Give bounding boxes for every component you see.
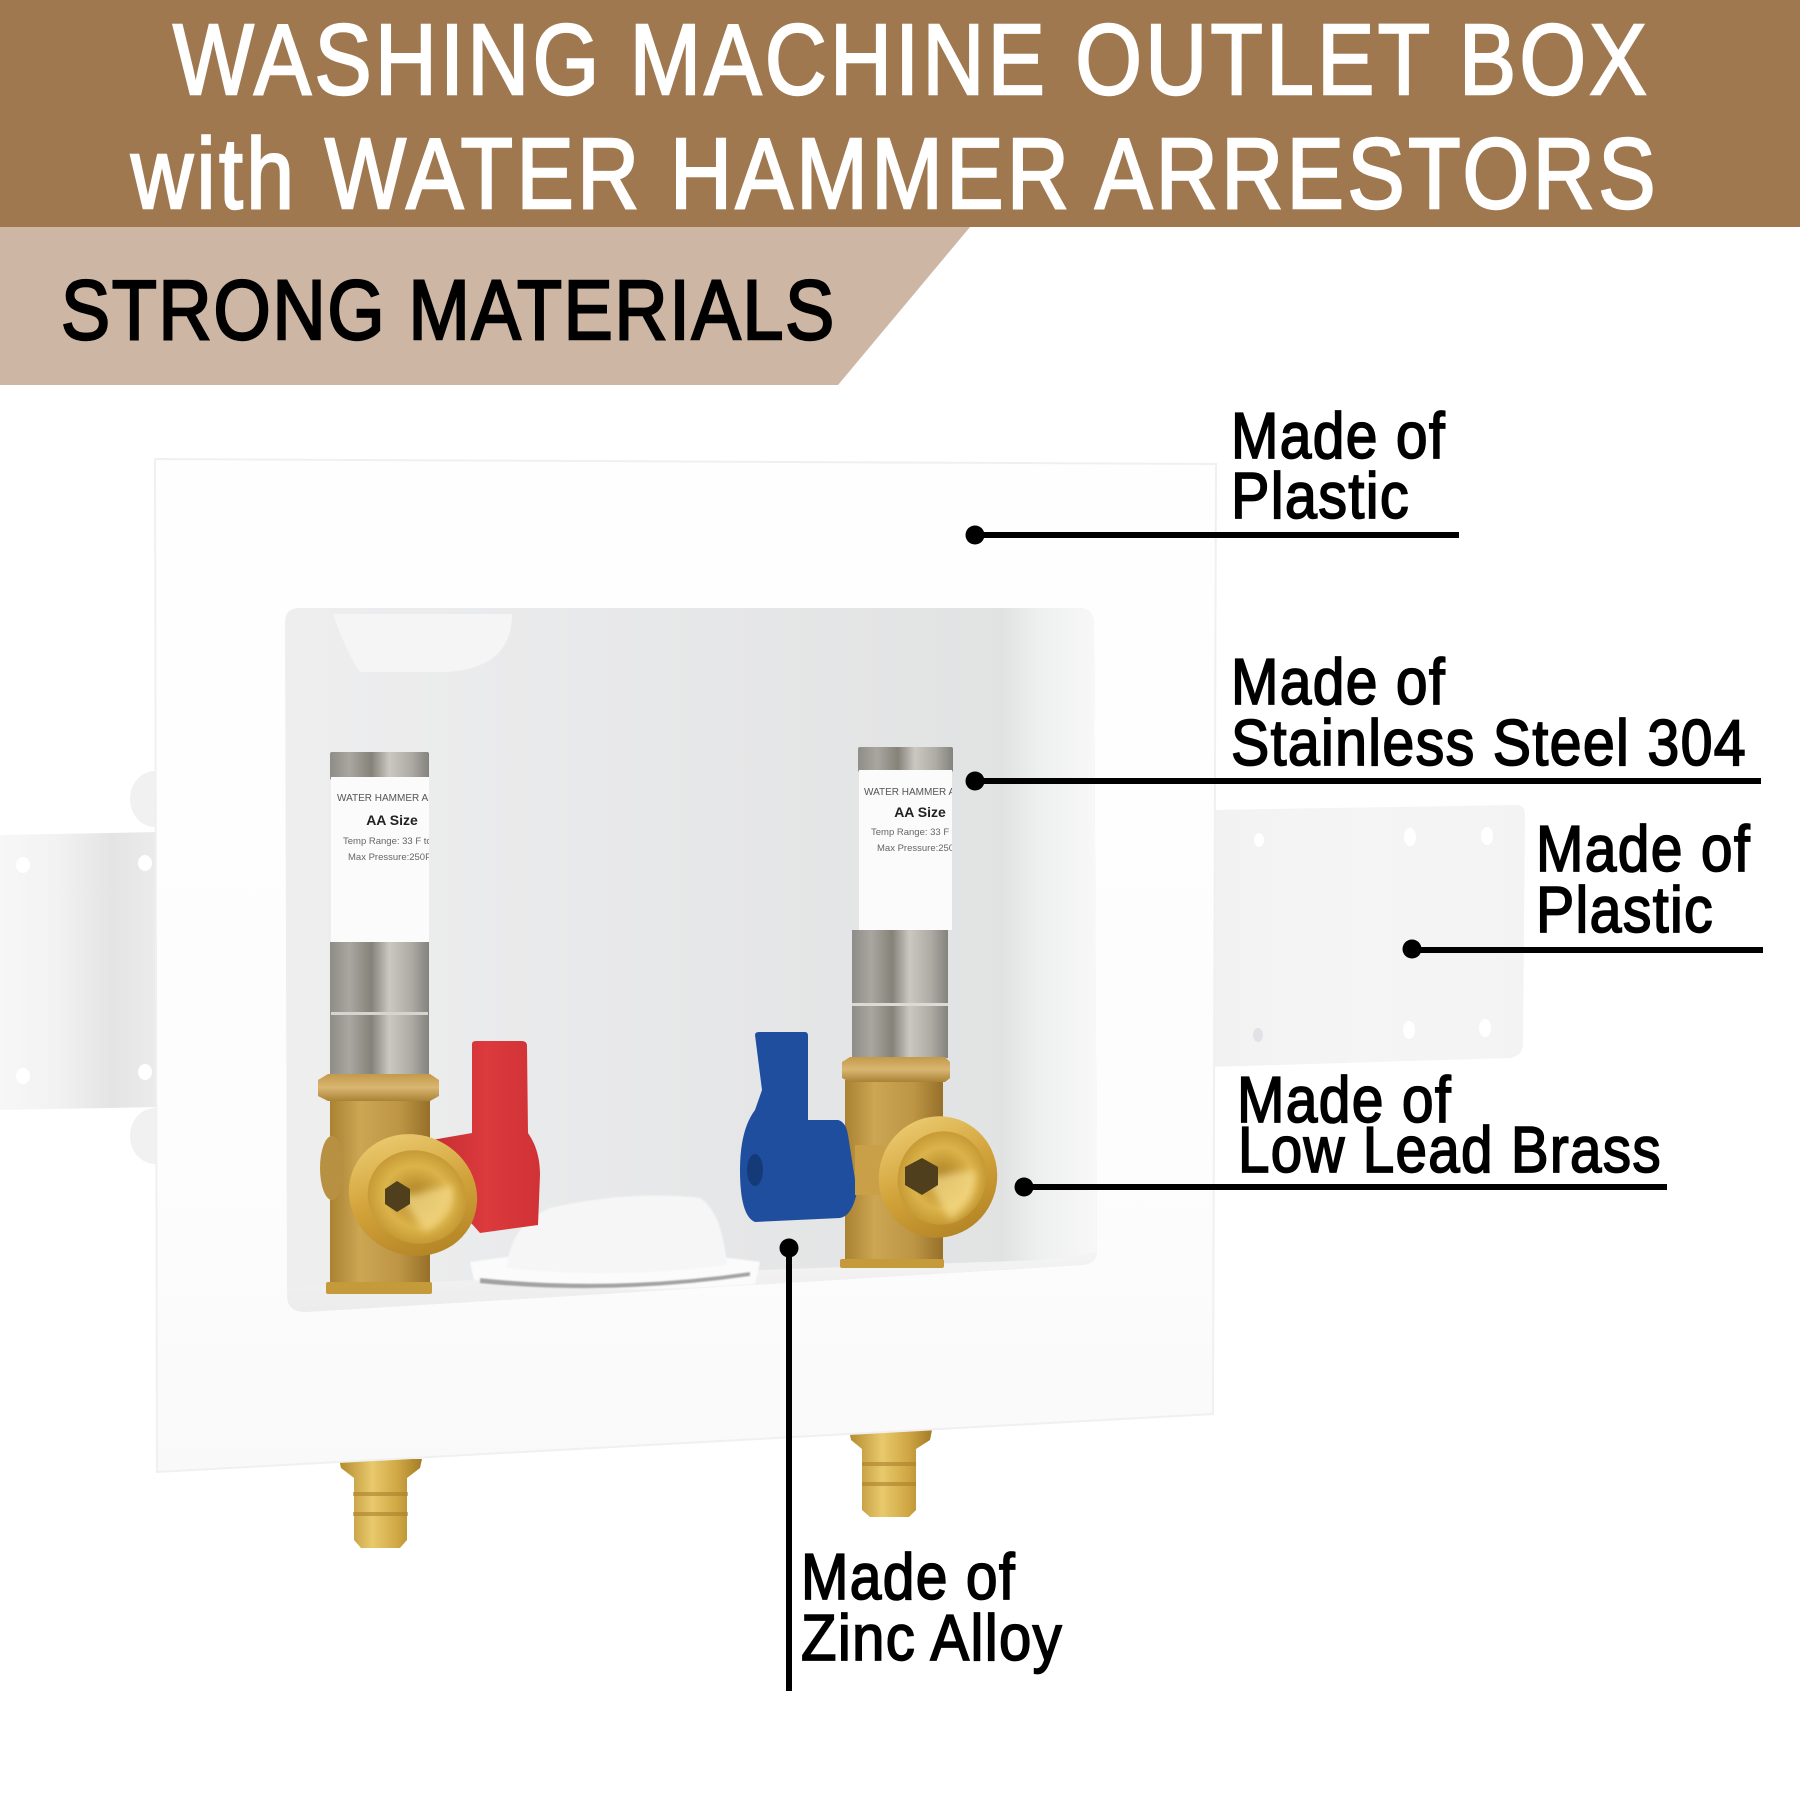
arrestor label: Max Pressure:250PSI [877,843,969,854]
arrestor label: AA Size [894,804,946,820]
callout: faceplate plastic [966,399,1459,544]
arrestor label: Max Pressure:250PSI [348,852,440,863]
arrestor label [859,770,952,930]
recess back wall [285,608,1097,1312]
right hose outlet [855,1099,1014,1255]
callout: zinc alloy: Made of [801,1540,1016,1613]
callout: stainless steel 304: Stainless Steel 304 [1231,706,1747,779]
arrestor label [331,777,429,942]
top clip [333,614,512,672]
recess floor [287,1252,1097,1312]
callout: faceplate plastic: Plastic [1231,459,1410,532]
drain cap [470,1196,760,1289]
arrestor label: Temp Range: 33 F to 200 [343,836,450,847]
title banner [0,0,1800,230]
recess right wall [1000,608,1097,1270]
callout: low lead brass [1014,1063,1667,1196]
faceplate [155,459,1216,1472]
section heading: strong materials [0,227,970,385]
left hose outlet [329,1113,497,1277]
callout: stainless steel 304 [966,645,1761,790]
callout: bracket plastic: Made of [1536,812,1751,885]
left water hammer arrestor [330,752,429,1074]
callout: bracket plastic [1402,812,1763,958]
callout: stainless steel 304: Made of [1231,645,1446,718]
callout: faceplate plastic: Made of [1231,399,1446,472]
blue handle [740,1032,857,1222]
callout: low lead brass: Made of [1237,1063,1452,1136]
callout: low lead brass: Low Lead Brass [1238,1113,1662,1186]
callout: zinc alloy: Zinc Alloy [801,1601,1063,1674]
callout: bracket plastic: Plastic [1536,873,1714,946]
outlet box product illustration [0,459,1525,1548]
left brass valve [318,1074,439,1294]
arrestor label: WATER HAMMER ARRESTOR [337,793,477,804]
right mounting bracket [1210,805,1525,1067]
arrestor label: Temp Range: 33 F to 200 [871,827,978,838]
callout: zinc alloy [780,1238,1063,1691]
PEX inlet left [339,1459,422,1548]
PEX inlet right [849,1430,932,1517]
handle hole [747,1154,763,1186]
section heading: strong materials: STRONG MATERIALS [61,263,836,357]
right brass valve [840,1057,950,1268]
red handle [432,1041,540,1233]
arrestor label: AA Size [366,812,418,828]
right water hammer arrestor [852,747,953,1058]
arrestor label: WATER HAMMER ARRESTOR [864,787,1004,798]
left mounting bracket [0,771,180,1164]
